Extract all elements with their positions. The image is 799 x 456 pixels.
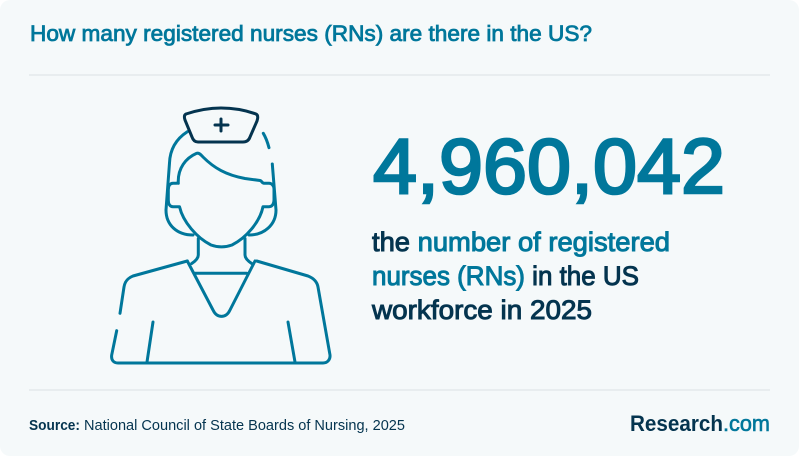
source: National Council of State Boards of Nursing, 2025	[84, 418, 405, 434]
neck line and collar	[187, 261, 255, 316]
description text: the number of registered	[372, 227, 670, 257]
statistic number: 4,960,042	[373, 122, 725, 210]
logo: Research	[630, 411, 723, 436]
source: Source:	[29, 418, 80, 434]
icon: nurse cap	[184, 108, 258, 142]
hair outline	[166, 132, 276, 235]
logo: .com	[723, 411, 770, 436]
description text	[371, 227, 670, 325]
shoulders and torso	[112, 261, 330, 363]
icon: nurse	[112, 132, 330, 363]
face and fringe	[168, 153, 274, 247]
neck	[192, 238, 252, 264]
description text: nurses (RNs) in the US	[372, 261, 639, 291]
description text: workforce in 2025	[371, 295, 592, 325]
title: How many registered nurses (RNs) are there in the US?	[30, 21, 592, 46]
